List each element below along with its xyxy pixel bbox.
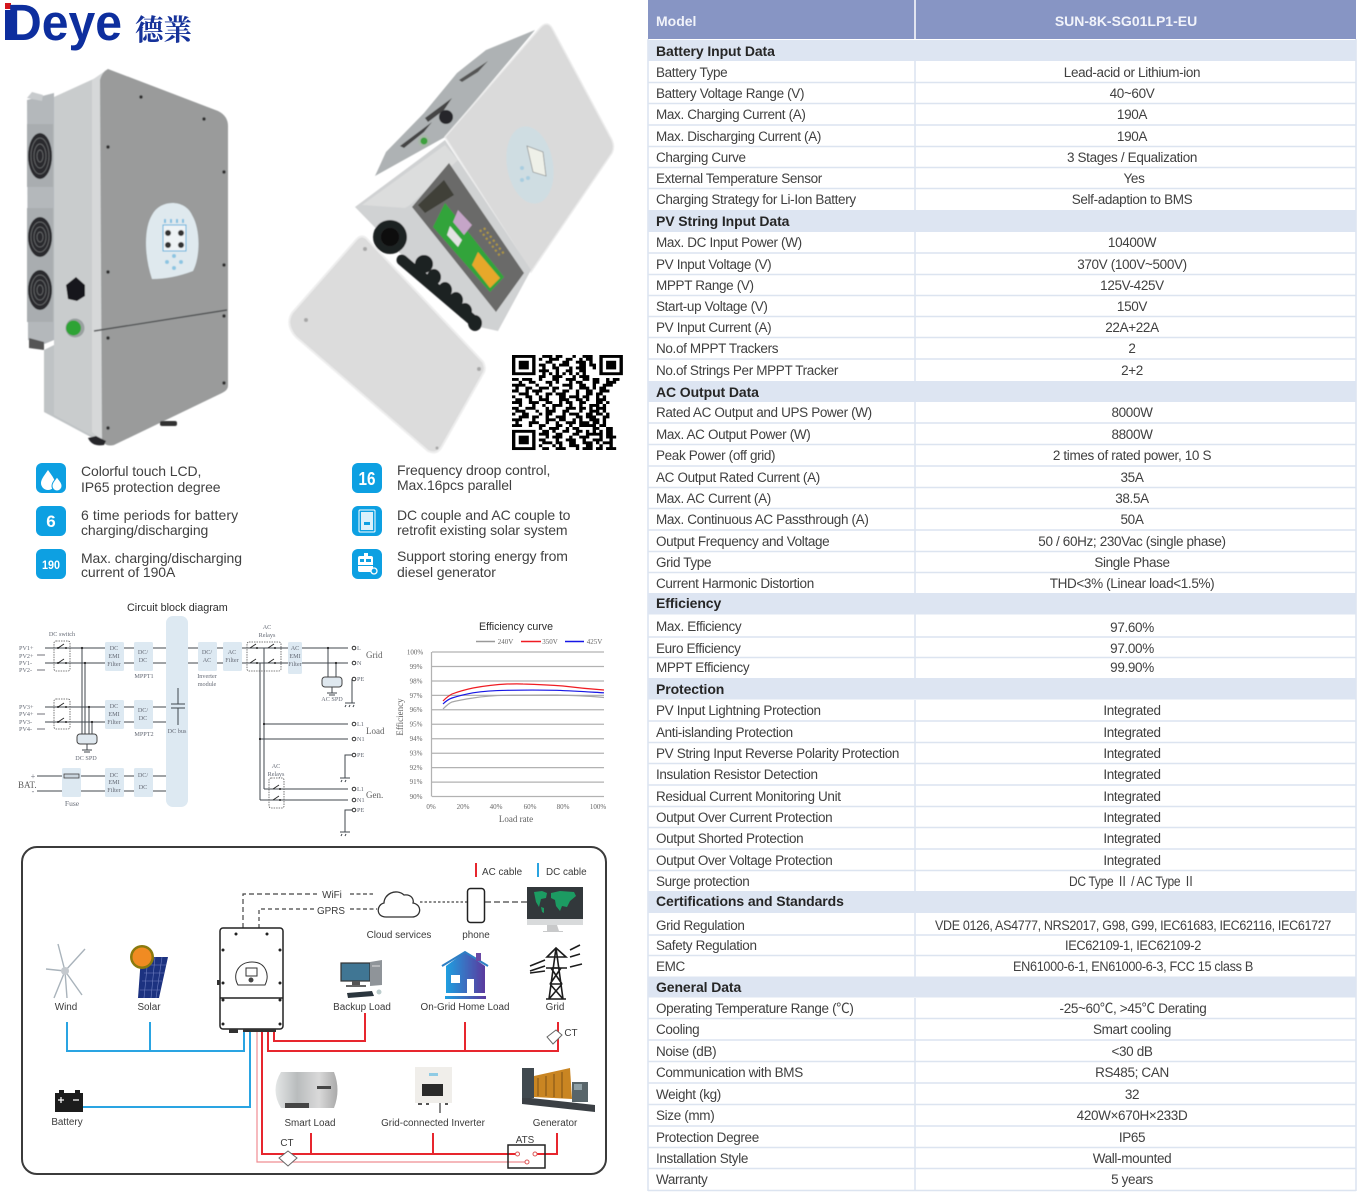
feature: diesel generator — [352, 548, 568, 580]
circuit labels: BAT. — [18, 780, 37, 790]
circuit labels: AC — [228, 649, 236, 656]
logo: Deye: 德業 — [135, 8, 196, 49]
feature: 190A: Max. charging/discharging — [81, 550, 242, 566]
section: Protection: Integrated — [1103, 789, 1161, 804]
circuit labels: PE — [357, 807, 364, 814]
circuit labels: Filter — [288, 661, 302, 668]
circuit labels: DC/ — [138, 772, 148, 779]
chart axis labels: 0% — [426, 803, 436, 811]
circuit labels: PV1- — [19, 660, 32, 667]
surge protectors — [77, 677, 342, 744]
section: AC Output Data: Current Harmonic Distortion — [656, 576, 814, 591]
section: AC Output Data: Output Frequency and Voltage — [656, 534, 829, 549]
section: AC Output Data: 8000W — [1111, 405, 1153, 420]
section: General Data — [648, 976, 1356, 1187]
feature: diesel generator: diesel generator — [397, 564, 496, 580]
chart axis labels — [395, 648, 606, 824]
circuit switch contacts — [57, 644, 337, 801]
feature: 16 parallel: Max.16pcs parallel — [397, 477, 512, 493]
section: General Data: Cooling — [656, 1022, 699, 1037]
section: Certifications and Standards: Certifications and Standards — [656, 893, 844, 909]
circuit wiring — [37, 648, 355, 836]
product photo: open inverter with cover — [289, 24, 614, 452]
circuit labels: PV4- — [19, 726, 32, 733]
circuit labels: Load — [366, 726, 385, 736]
icon: cloud — [378, 892, 420, 917]
section: AC Output Data: 2 times of rated power, 10 S — [1053, 448, 1211, 463]
section: PV String Input Data: 125V-425V — [1100, 278, 1164, 293]
section: AC Output Data: Grid Type — [656, 555, 711, 570]
section: Protection: Output Over Current Protection — [656, 810, 832, 825]
circuit labels: PV2- — [19, 667, 32, 674]
chart axis labels: 96% — [410, 706, 423, 714]
section: PV String Input Data: 150V — [1117, 299, 1147, 314]
chart axis labels: 80% — [557, 803, 570, 811]
chart axis labels: 20% — [457, 803, 470, 811]
cable legend: AC cable — [482, 867, 523, 878]
section: AC Output Data: AC Output Rated Current (A) — [656, 470, 820, 485]
section: Battery Input Data: Charging Curve — [656, 150, 746, 165]
section: AC Output Data: 35A — [1121, 470, 1144, 485]
component labels: Grid-connected Inverter — [381, 1118, 486, 1129]
chart axis labels: 98% — [410, 678, 423, 686]
icon: current transformer (top): CT — [564, 1028, 578, 1039]
section: Battery Input Data: 190A — [1117, 107, 1147, 122]
chart axis labels: 95% — [410, 720, 423, 728]
fan vents — [27, 124, 53, 322]
section: Efficiency: 99.90% — [1110, 660, 1154, 675]
circuit labels: Filter — [107, 719, 121, 726]
component labels — [51, 930, 578, 1146]
feature: 6 time periods — [36, 506, 238, 538]
circuit labels: L1 — [357, 721, 364, 728]
section: AC Output Data: 8800W — [1111, 427, 1153, 442]
section: Certifications and Standards: VDE 0126, AS4777, NRS2017, G98, G99, IEC61683, IEC62116, IEC61727 — [935, 918, 1331, 933]
section: General Data: Protection Degree — [656, 1130, 759, 1145]
specification table — [648, 0, 1356, 1191]
section: Protection: DC Type Ⅱ / AC Type Ⅱ — [1069, 874, 1195, 889]
WiFi and GPRS labels: WiFi — [322, 890, 342, 901]
feature: IP65 water drops: Colorful touch LCD, — [81, 463, 201, 479]
chart axis labels: 60% — [524, 803, 537, 811]
WiFi and GPRS labels — [317, 890, 345, 917]
section: PV String Input Data: No.of Strings Per MPPT Tracker — [656, 363, 839, 378]
circuit filter and converter blocks — [62, 616, 302, 807]
section: General Data: <30 dB — [1111, 1044, 1153, 1059]
circuit labels: DC — [110, 703, 118, 710]
section: Battery Input Data: 40~60V — [1110, 86, 1155, 101]
circuit labels: Gen. — [366, 790, 383, 800]
section: PV String Input Data: PV String Input Data — [656, 213, 790, 229]
section: General Data: IP65 — [1119, 1130, 1145, 1145]
section: General Data: Weight (kg) — [656, 1087, 721, 1102]
circuit labels: Filter — [107, 661, 121, 668]
chart legend — [476, 638, 602, 646]
section: PV String Input Data: No.of MPPT Trackers — [656, 341, 779, 356]
section: AC Output Data: 50A — [1121, 512, 1144, 527]
section: AC Output Data: AC Output Data — [656, 384, 759, 400]
section: Battery Input Data: Yes — [1124, 171, 1145, 186]
circuit labels: N — [357, 660, 362, 667]
circuit labels: PV1+ — [19, 645, 34, 652]
section: PV String Input Data: 10400W — [1108, 235, 1157, 250]
circuit labels: Relays — [259, 632, 276, 639]
section: PV String Input Data: MPPT Range (V) — [656, 278, 754, 293]
section: AC Output Data: Single Phase — [1094, 555, 1170, 570]
efficiency curve chart — [395, 621, 606, 824]
section: Battery Input Data: Self-adaption to BMS — [1072, 192, 1193, 207]
section: PV String Input Data: 370V (100V~500V) — [1077, 257, 1187, 272]
section: Protection — [648, 678, 1356, 889]
section: Protection: Output Shorted Protection — [656, 831, 803, 846]
section: PV String Input Data: 22A+22A — [1105, 320, 1159, 335]
circuit labels: DC switch — [49, 631, 76, 638]
feature: DC and AC couple: DC couple and AC couple to — [397, 507, 571, 523]
section: PV String Input Data: PV Input Voltage (V) — [656, 257, 771, 272]
chart axis labels: 92% — [410, 764, 423, 772]
section: Battery Input Data: Battery Input Data — [656, 43, 775, 59]
feature: 190A — [36, 549, 242, 580]
feature: 16 parallel: Frequency droop control, — [397, 462, 550, 478]
feature: 190A: current of 190A — [81, 564, 176, 580]
component labels: Grid — [546, 1002, 564, 1013]
section: Protection: Integrated — [1103, 725, 1161, 740]
circuit labels: N1 — [357, 797, 365, 804]
section: Battery Input Data: Max. Discharging Current (A) — [656, 129, 821, 144]
chart axis labels: 94% — [410, 735, 423, 743]
icon: monitor — [527, 887, 583, 932]
section: Protection: Insulation Resistor Detection — [656, 767, 818, 782]
section: Protection: PV String Input Reverse Polarity Protection — [656, 746, 899, 761]
table header: Model — [656, 13, 696, 29]
LCD panel — [146, 203, 198, 279]
section: General Data: RS485; CAN — [1095, 1065, 1169, 1080]
WiFi and GPRS labels: GPRS — [317, 906, 345, 917]
circuit labels: Filter — [225, 657, 239, 664]
section: Protection: Integrated — [1103, 767, 1161, 782]
cable legend — [476, 863, 587, 878]
section: Battery Input Data: 190A — [1117, 129, 1147, 144]
section: AC Output Data: Rated AC Output and UPS Power (W) — [656, 405, 872, 420]
component labels: Generator — [533, 1118, 578, 1129]
section: Efficiency: Euro Efficiency — [656, 641, 741, 656]
circuit labels: DC/ — [138, 649, 148, 656]
section: General Data: Smart cooling — [1093, 1022, 1171, 1037]
cable legend: DC cable — [546, 867, 587, 878]
section: Efficiency: MPPT Efficiency — [656, 660, 750, 675]
icon: grid-connected inverter — [415, 1067, 452, 1113]
section: Protection: Output Over Voltage Protection — [656, 853, 832, 868]
circuit labels: AC SPD — [321, 696, 343, 703]
circuit labels: PE — [357, 752, 364, 759]
section: AC Output Data — [648, 381, 1356, 591]
circuit labels: + — [31, 772, 36, 781]
circuit labels: DC — [110, 772, 118, 779]
circuit labels: Inverter — [197, 673, 217, 680]
feature: 16 parallel: 16 — [358, 469, 376, 489]
section: Certifications and Standards: IEC62109-1, IEC62109-2 — [1065, 938, 1201, 953]
chart axis labels: Load rate — [499, 814, 533, 824]
icon: smart load water heater — [276, 1072, 338, 1108]
component labels: Cloud services — [367, 930, 431, 941]
feature: DC and AC couple — [352, 506, 571, 538]
AC wiring — [257, 1013, 558, 1162]
circuit labels: DC/ — [138, 707, 148, 714]
chart axis labels: 90% — [410, 793, 423, 801]
section: PV String Input Data: 2 — [1128, 341, 1136, 356]
section: General Data: Noise (dB) — [656, 1044, 716, 1059]
circuit labels: EMI — [108, 779, 120, 786]
circuit labels: PV3- — [19, 719, 32, 726]
icon: current transformer (bottom) — [279, 1138, 297, 1166]
section: General Data: Size (mm) — [656, 1108, 714, 1123]
section: Efficiency: 97.60% — [1110, 620, 1154, 635]
section: General Data: 32 — [1125, 1087, 1139, 1102]
circuit labels: AC — [291, 645, 299, 652]
section: AC Output Data: 50 / 60Hz; 230Vac (single phase) — [1038, 534, 1226, 549]
component labels: Smart Load — [284, 1118, 336, 1129]
terminals — [352, 646, 356, 812]
section: Protection: Integrated — [1103, 703, 1161, 718]
section: Protection: PV Input Lightning Protection — [656, 703, 821, 718]
section: AC Output Data: Max. Continuous AC Passthrough (A) — [656, 512, 868, 527]
section: General Data: Installation Style — [656, 1151, 748, 1166]
communication dashed links — [243, 894, 527, 928]
open interior with circuit board — [412, 163, 524, 312]
circuit labels: DC — [139, 715, 147, 722]
circuit labels: AC — [272, 763, 280, 770]
feature: 190A: 190 — [42, 560, 60, 572]
circuit labels: EMI — [108, 711, 120, 718]
section: Certifications and Standards — [648, 891, 1356, 974]
feature list — [36, 462, 571, 580]
circuit labels: MPPT2 — [134, 731, 154, 738]
section: Battery Input Data: Lead-acid or Lithium-ion — [1064, 65, 1200, 80]
section: AC Output Data: 38.5A — [1115, 491, 1149, 506]
chart legend: 240V — [498, 638, 513, 646]
circuit labels: MPPT1 — [134, 673, 154, 680]
circuit labels: L1 — [357, 786, 364, 793]
section: Efficiency — [648, 593, 1356, 675]
section: General Data: 5 years — [1111, 1172, 1154, 1187]
icon: phone — [468, 888, 484, 922]
section: Protection: Integrated — [1103, 746, 1161, 761]
section: PV String Input Data — [648, 210, 1356, 378]
circuit labels: AC — [203, 657, 211, 664]
component labels: Solar — [137, 1002, 161, 1013]
component labels: Wind — [55, 1002, 77, 1013]
circuit block diagram — [18, 602, 385, 836]
circuit labels: DC — [139, 657, 147, 664]
circuit labels: PE — [357, 676, 364, 683]
section: Efficiency: Max. Efficiency — [656, 619, 742, 634]
section: Battery Input Data: Max. Charging Current (A) — [656, 107, 806, 122]
circuit labels: DC — [110, 645, 118, 652]
section: PV String Input Data: Max. DC Input Power (W) — [656, 235, 802, 250]
icon: generator — [522, 1068, 595, 1112]
circuit switch boxes — [54, 641, 284, 808]
circuit labels: AC — [263, 624, 271, 631]
section: Certifications and Standards: Grid Regulation — [656, 918, 745, 933]
section: General Data: Communication with BMS — [656, 1065, 803, 1080]
section: Efficiency: Efficiency — [656, 595, 721, 611]
chart axis labels: Efficiency — [395, 698, 405, 736]
section: General Data: Warranty — [656, 1172, 708, 1187]
section: Certifications and Standards: Safety Regulation — [656, 938, 757, 953]
circuit labels: DC SPD — [75, 755, 97, 762]
section: Efficiency: 97.00% — [1110, 641, 1154, 656]
circuit labels: DC — [139, 784, 147, 791]
section: AC Output Data: THD<3% (Linear load<1.5%) — [1050, 576, 1214, 591]
chart heading: Efficiency curve — [479, 621, 553, 633]
section: PV String Input Data: Start-up Voltage (V) — [656, 299, 768, 314]
circuit labels: module — [198, 681, 217, 688]
component labels: phone — [462, 930, 490, 941]
chart grid — [432, 652, 604, 796]
section: Protection: Integrated — [1103, 810, 1161, 825]
section: Protection: Surge protection — [656, 874, 749, 889]
section: AC Output Data: Peak Power (off grid) — [656, 448, 775, 463]
section: AC Output Data: Max. AC Output Power (W) — [656, 427, 810, 442]
section: Battery Input Data: Battery Voltage Range (V) — [656, 86, 804, 101]
icon: grid pylon — [530, 945, 582, 999]
section: PV String Input Data: 2+2 — [1121, 363, 1143, 378]
circuit labels — [18, 624, 385, 814]
DC wiring — [67, 1022, 250, 1107]
feature: IP65 water drops: IP65 protection degree — [81, 479, 221, 495]
section: PV String Input Data: PV Input Current (A) — [656, 320, 771, 335]
chart legend: 425V — [587, 638, 602, 646]
icon: hybrid inverter — [217, 928, 283, 1033]
circuit labels: DC bus — [168, 728, 187, 735]
circuit labels: PV4+ — [19, 711, 34, 718]
icon: backup load computer — [341, 960, 382, 998]
component labels: On-Grid Home Load — [421, 1002, 509, 1013]
cable glands — [373, 220, 482, 331]
circuit labels: DC/ — [202, 649, 212, 656]
section: Battery Input Data — [648, 40, 1356, 207]
icon: current transformer (top) — [547, 1028, 578, 1044]
circuit labels: N1 — [357, 736, 365, 743]
product photo: closed inverter — [27, 69, 228, 446]
section: General Data: Wall-mounted — [1093, 1151, 1171, 1166]
section: Protection: Residual Current Monitoring Unit — [656, 789, 841, 804]
component labels: Backup Load — [333, 1002, 391, 1013]
icon: battery — [55, 1090, 83, 1112]
component labels: Battery — [51, 1117, 83, 1128]
feature: 6 time periods: charging/discharging — [81, 522, 208, 538]
section: Protection: Protection — [656, 681, 724, 697]
section: General Data: -25~60℃, >45℃ Derating — [1060, 1001, 1206, 1016]
rotary switch and green button — [66, 277, 85, 338]
icon: current transformer (bottom): CT — [280, 1138, 294, 1149]
section: General Data: Operating Temperature Range (℃) — [656, 1001, 854, 1016]
section: Battery Input Data: Charging Strategy for Li-Ion Battery — [656, 192, 856, 207]
circuit labels: EMI — [108, 653, 120, 660]
feature: IP65 water drops — [36, 463, 221, 495]
section: AC Output Data: Max. AC Current (A) — [656, 491, 771, 506]
circuit labels: L — [357, 645, 361, 652]
section: Certifications and Standards: EMC — [656, 959, 686, 974]
circuit labels: Filter — [107, 787, 121, 794]
icon: ATS switch — [508, 1145, 545, 1168]
section: General Data: 420W×670H×233D — [1077, 1108, 1188, 1123]
circuit labels: PV3+ — [19, 704, 34, 711]
feature: diesel generator: Support storing energy from — [397, 548, 568, 564]
circuit labels: Relays — [268, 771, 285, 778]
removed cover plate — [289, 236, 485, 452]
section: General Data: General Data — [656, 979, 741, 995]
chart curves — [443, 684, 604, 709]
icon: solar panel — [130, 945, 168, 998]
section: Certifications and Standards: EN61000-6-1, EN61000-6-3, FCC 15 class B — [1013, 959, 1253, 974]
section: Battery Input Data: 3 Stages / Equalization — [1067, 150, 1197, 165]
circuit labels: EMI — [289, 653, 301, 660]
chart legend: 350V — [542, 638, 558, 646]
icon: on-grid home — [442, 952, 488, 999]
section: Battery Input Data: External Temperature Sensor — [656, 171, 823, 186]
chart axis labels: 100% — [590, 803, 606, 811]
section: Protection: Integrated — [1103, 831, 1161, 846]
icon: wind turbine — [46, 944, 85, 998]
circuit labels: - — [32, 787, 35, 796]
feature: 6 time periods: 6 time periods for battery — [81, 507, 238, 523]
section: Protection: Anti-islanding Protection — [656, 725, 793, 740]
circuit labels: Grid — [366, 650, 383, 660]
section: Protection: Integrated — [1103, 853, 1161, 868]
chart axis labels: 100% — [407, 648, 423, 656]
component labels: ATS — [516, 1135, 535, 1146]
feature: 16 parallel — [352, 462, 550, 493]
table header — [648, 0, 1356, 39]
circuit heading: Circuit block diagram — [127, 602, 228, 614]
system diagram panel — [22, 847, 606, 1174]
logo: Deye — [5, 0, 196, 51]
feature: DC and AC couple: retrofit existing solar system — [397, 522, 568, 538]
section: Battery Input Data: Battery Type — [656, 65, 727, 80]
circuit labels: Fuse — [65, 799, 80, 808]
chart axis labels: 91% — [410, 778, 423, 786]
feature: 6 time periods: 6 — [46, 512, 56, 531]
table header: SUN-8K-SG01LP1-EU — [1055, 13, 1197, 29]
chart axis labels: 97% — [410, 692, 423, 700]
chart axis labels: 40% — [490, 803, 503, 811]
chart axis labels: 93% — [410, 750, 423, 758]
chart axis labels: 99% — [410, 663, 423, 671]
circuit labels: PV2+ — [19, 653, 34, 660]
QR code — [512, 356, 621, 449]
